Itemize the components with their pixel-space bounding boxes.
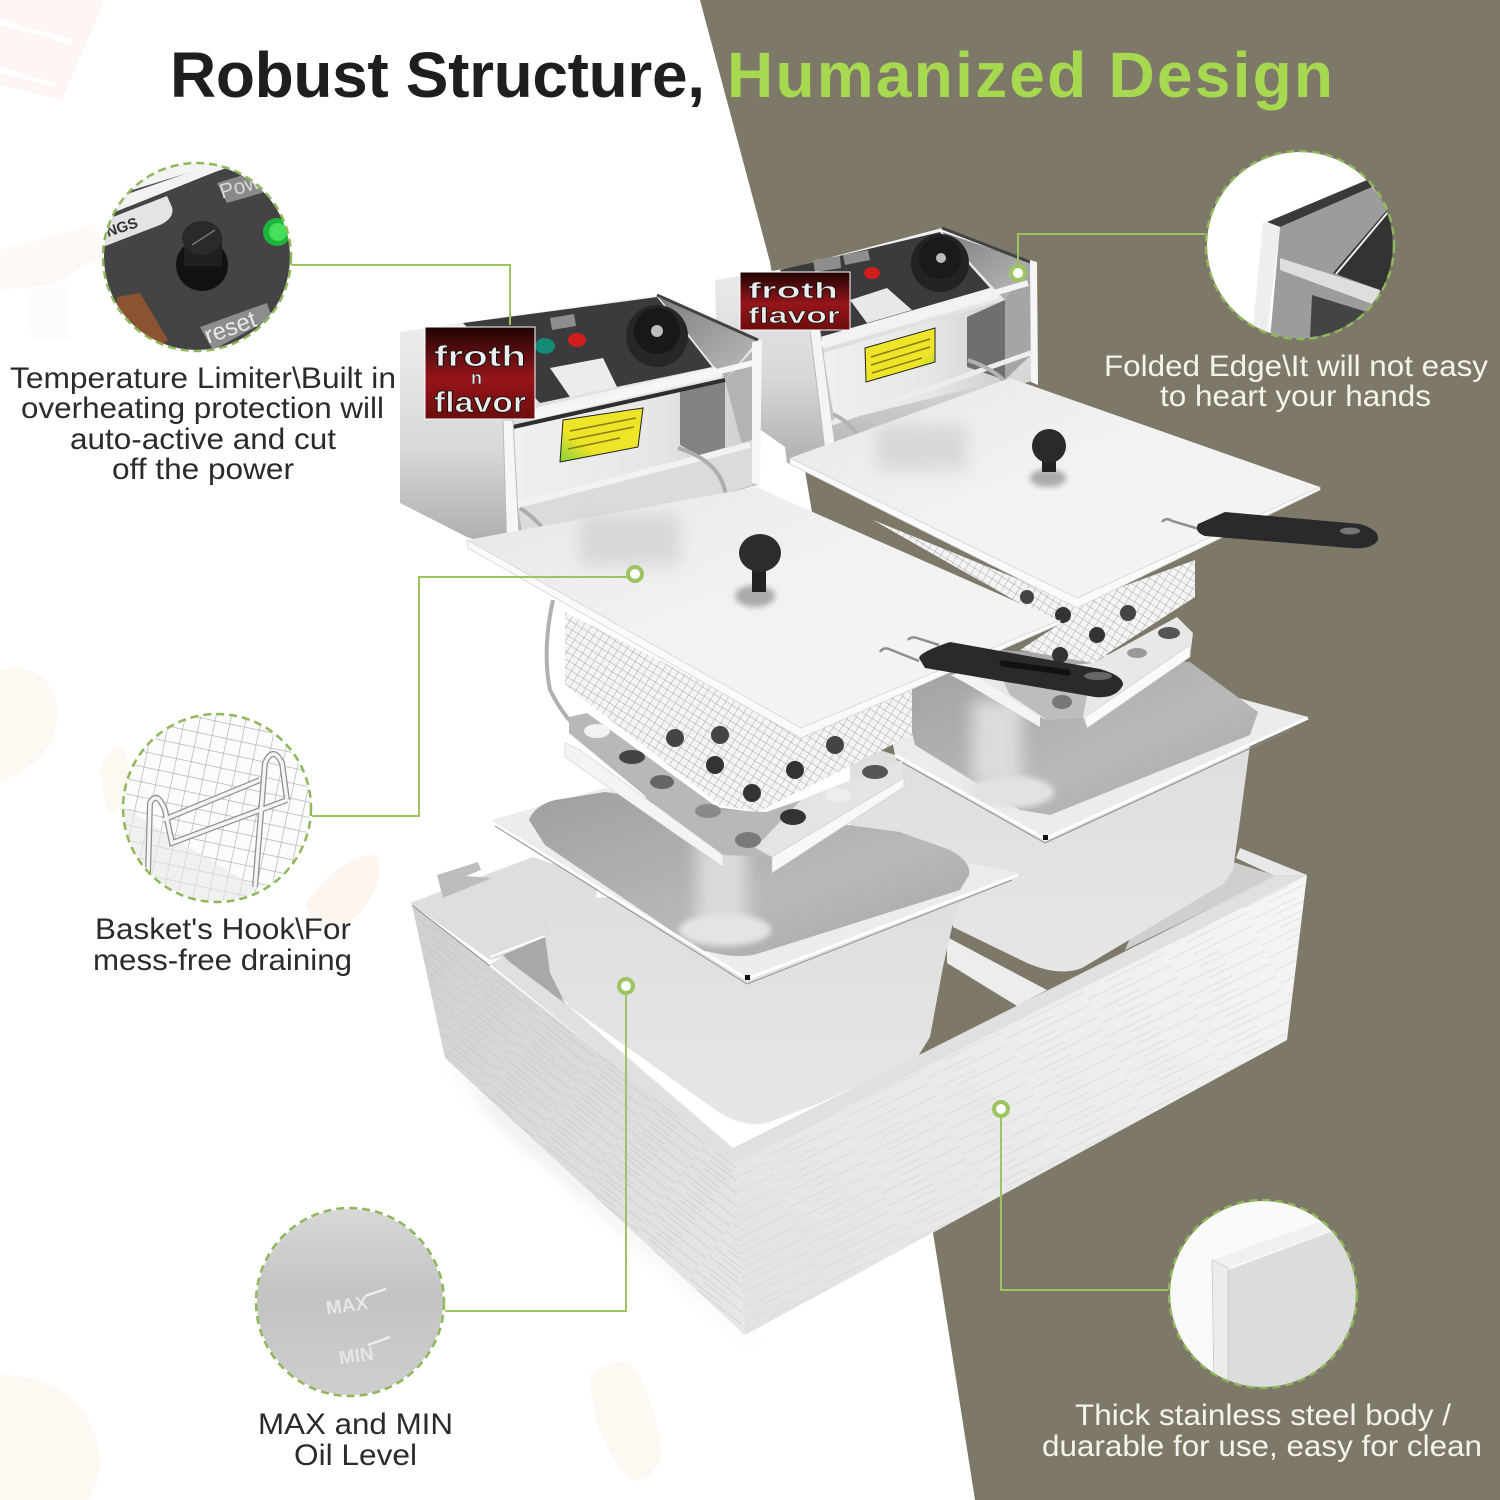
text: basket hook: Basket's Hook\For xyxy=(95,913,351,946)
left basket frame xyxy=(565,713,904,873)
text: folded edge: to heart your hands xyxy=(1160,380,1431,413)
text: temperature limiter xyxy=(10,362,396,486)
right fryer head xyxy=(715,228,1038,477)
circle: max min level detail: MIN xyxy=(338,1344,375,1369)
right sticker: flavor xyxy=(748,303,841,328)
callout: basket hook leader xyxy=(312,567,642,816)
circle: temperature limiter detail: NGS xyxy=(104,215,140,241)
circle: temperature limiter detail xyxy=(100,160,300,360)
right fryer lid xyxy=(790,378,1320,608)
text: temperature limiter: auto-active and cut xyxy=(70,423,337,456)
text: oil level xyxy=(258,1408,453,1472)
callout: oil level leader xyxy=(445,979,633,1311)
left fryer lid xyxy=(467,487,1060,738)
right basket frame xyxy=(950,617,1193,728)
outer body front faces xyxy=(412,875,1307,1335)
left fryer basket xyxy=(547,600,912,812)
left fryer handle xyxy=(880,637,1123,697)
right fryer handle xyxy=(1162,512,1378,548)
text: temperature limiter: off the power xyxy=(112,453,294,486)
text: steel body: Thick stainless steel body / xyxy=(1075,1399,1452,1432)
left sticker: froth xyxy=(434,341,526,373)
stainless steel outer body xyxy=(445,848,1307,1350)
circle: steel thickness detail xyxy=(1168,1200,1358,1390)
circle: max min level detail xyxy=(256,1208,444,1396)
circle: temperature limiter detail: reset xyxy=(201,306,261,350)
right sticker xyxy=(740,272,850,330)
text: steel body: duarable for use, easy for clean xyxy=(1042,1430,1482,1463)
olive background panel xyxy=(700,0,1500,1500)
text: folded edge xyxy=(1104,350,1488,413)
right sticker: froth xyxy=(748,278,838,303)
circle: max min level detail: MAX xyxy=(325,1293,370,1320)
left sticker xyxy=(425,327,535,419)
text: folded edge: Folded Edge\It will not easy xyxy=(1104,350,1488,383)
callout: temperature limiter leader xyxy=(292,265,510,325)
text: steel body xyxy=(1042,1399,1482,1463)
faint food decoration xyxy=(0,0,662,1500)
text: oil level: MAX and MIN xyxy=(258,1408,453,1441)
text: temperature limiter: Temperature Limiter\Built in xyxy=(10,362,396,395)
left sticker: flavor xyxy=(434,387,526,419)
left fryer head xyxy=(400,295,762,554)
circle: basket hook detail xyxy=(120,712,320,907)
circle: temperature limiter detail: Pow xyxy=(217,170,263,204)
left sticker: n xyxy=(471,368,482,388)
right oil pan xyxy=(850,650,1308,972)
callout: steel body leader xyxy=(994,1102,1168,1290)
title: Humanized Design xyxy=(727,39,1333,111)
right fryer basket xyxy=(873,520,1195,663)
text: temperature limiter: overheating protection will xyxy=(21,392,384,425)
text: basket hook: mess-free draining xyxy=(93,944,352,977)
title: Robust Structure, xyxy=(170,39,705,111)
circle: folded edge detail xyxy=(1205,150,1395,340)
text: oil level: Oil Level xyxy=(294,1439,417,1472)
text: basket hook xyxy=(93,913,352,977)
title xyxy=(170,39,1333,111)
box interior and left pan xyxy=(410,788,1018,1150)
callout: folded edge leader xyxy=(1011,234,1205,280)
